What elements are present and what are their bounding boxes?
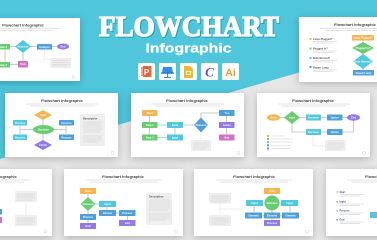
slide description <box>26 104 98 106</box>
leader line <box>313 135 325 146</box>
slide description <box>320 28 377 30</box>
node: decision circle: Decision <box>267 201 278 205</box>
node: start: Start <box>85 189 91 193</box>
step list: Process <box>340 208 350 212</box>
note box <box>50 58 71 68</box>
slide heading: Flowchart Infographic <box>233 174 276 179</box>
page marker <box>111 152 114 154</box>
icon: PowerPoint: P <box>144 68 150 77</box>
panel: slide middle left <box>5 93 118 157</box>
note box <box>325 140 346 151</box>
node: process bottom right: Process <box>61 135 72 139</box>
question list: Lamp Plugged? <box>313 37 333 41</box>
page marker <box>362 152 366 154</box>
title: FLOWCHART <box>99 11 279 43</box>
connectors <box>20 115 66 145</box>
leader line <box>200 132 202 140</box>
app icons <box>138 63 239 80</box>
panel: slide top left <box>0 18 80 81</box>
slide description <box>85 180 162 182</box>
connectors <box>362 40 364 70</box>
slide description <box>0 28 60 30</box>
subtitle: Infographic <box>146 40 232 56</box>
node: review: Review <box>103 211 113 215</box>
node: input right: Input <box>286 201 293 205</box>
node: end: End <box>61 44 66 48</box>
connectors <box>88 194 128 223</box>
node: process top left: Process <box>15 121 26 125</box>
node: bulb burned: Bulb Burned? <box>354 60 372 64</box>
page marker <box>44 230 47 233</box>
panel: slide bottom left <box>0 169 52 236</box>
note box lower <box>15 215 37 226</box>
step list: End <box>340 218 345 222</box>
slide description <box>0 180 30 182</box>
node: decision bottom: Decision <box>308 130 319 134</box>
node: decision top: Decision <box>308 116 319 120</box>
icon: Canva: C <box>205 64 214 80</box>
node: input left: Input <box>251 201 258 205</box>
node: process: Process <box>83 215 94 219</box>
node: repair lamp: Repair Lamp <box>356 71 372 75</box>
icon: Keynote <box>159 63 176 80</box>
node: start: Start <box>269 189 275 193</box>
step list: Input <box>340 200 346 204</box>
node: end: End <box>224 136 230 140</box>
node: start: Start <box>271 116 277 120</box>
node: decision diamond: Decision <box>83 202 94 206</box>
page marker <box>306 230 308 233</box>
node: finish diamond: Finish <box>39 143 47 147</box>
slide description <box>216 180 292 182</box>
leader lines <box>209 198 246 220</box>
node: process top right: Process <box>61 121 72 125</box>
node: decision diamond: Decision <box>196 123 207 127</box>
node: analysis: Analysis <box>39 45 50 49</box>
slide heading: Flowchart Infographic <box>2 22 45 28</box>
question list <box>310 37 337 72</box>
description box: Description: <box>149 194 164 198</box>
node: yes: Yes <box>225 111 230 115</box>
question list: Repair Lamp <box>313 66 329 70</box>
note box <box>191 140 211 151</box>
connectors <box>5 46 57 64</box>
page marker <box>72 76 75 78</box>
node: decision diamond: Decision <box>18 44 29 48</box>
node: step 2: Step 2 <box>146 136 154 140</box>
node: process right: Process <box>122 211 133 215</box>
connectors <box>150 113 226 138</box>
slide description <box>151 104 224 106</box>
slide heading: Flowchart Infographic <box>166 98 209 103</box>
slide heading: Flowchart Infographic <box>334 22 377 27</box>
icon: Illustrator: Ai <box>225 67 236 79</box>
slide heading: Flowchart Infographic <box>292 98 335 103</box>
step list <box>336 190 364 224</box>
note box upper <box>209 193 231 204</box>
legend <box>267 135 293 150</box>
node: element left: Element <box>248 214 259 218</box>
connectors <box>254 194 290 220</box>
node: end: End <box>351 116 356 120</box>
node: lamp plugged: Lamp Plugged? <box>353 36 373 40</box>
question list: Bulb Burned? <box>313 56 331 60</box>
page marker <box>237 152 240 154</box>
node: process bottom left: Process <box>15 135 26 139</box>
node: end right: End <box>125 221 130 225</box>
node: start diamond: Start <box>40 113 46 117</box>
node: option bottom: Option <box>331 130 339 134</box>
node: element right: Element <box>285 214 296 218</box>
description box: Description <box>83 116 98 120</box>
node: option top: Option <box>331 116 339 120</box>
node: process <box>370 212 377 218</box>
question list: Plugged In? <box>313 46 328 50</box>
node: action: Action <box>223 123 231 127</box>
panel: slide bottom centre-right <box>194 169 313 236</box>
node: input diamond: Input <box>289 116 295 120</box>
panel: slide top right <box>299 17 377 82</box>
slide heading: Flowchart Infographic <box>41 98 84 103</box>
panel: slide middle centre <box>131 93 244 157</box>
panel: slide bottom right <box>326 169 377 236</box>
node: start: Start <box>147 111 153 115</box>
icon: Google Slides <box>180 63 197 80</box>
slide description <box>277 104 350 106</box>
slide description <box>347 180 377 182</box>
leader line <box>44 49 50 60</box>
node: blue <box>0 209 2 214</box>
node: input 1: Input <box>172 123 178 127</box>
panel: slide middle right <box>257 93 370 157</box>
panel: slide bottom centre-left <box>64 169 183 236</box>
page marker <box>174 230 178 233</box>
note box lower <box>209 215 231 226</box>
node: step 1: Step 1 <box>146 123 154 127</box>
note box upper <box>15 191 37 202</box>
connectors <box>25 202 27 215</box>
node: task: Task <box>20 62 26 66</box>
slide heading: Flowchart Infographic <box>102 174 145 179</box>
connectors <box>280 118 354 132</box>
node: decision ellipse: Decision <box>38 128 49 132</box>
node: element centre: Element <box>267 214 277 218</box>
step list: Start <box>340 190 346 194</box>
node: input 2: Input <box>172 136 178 140</box>
node: end left: End <box>86 224 91 228</box>
node: pink <box>0 217 2 223</box>
node: process: Process <box>267 221 278 225</box>
node: plugged in: Plugged In? <box>356 46 371 50</box>
node: input: Input <box>104 202 111 206</box>
